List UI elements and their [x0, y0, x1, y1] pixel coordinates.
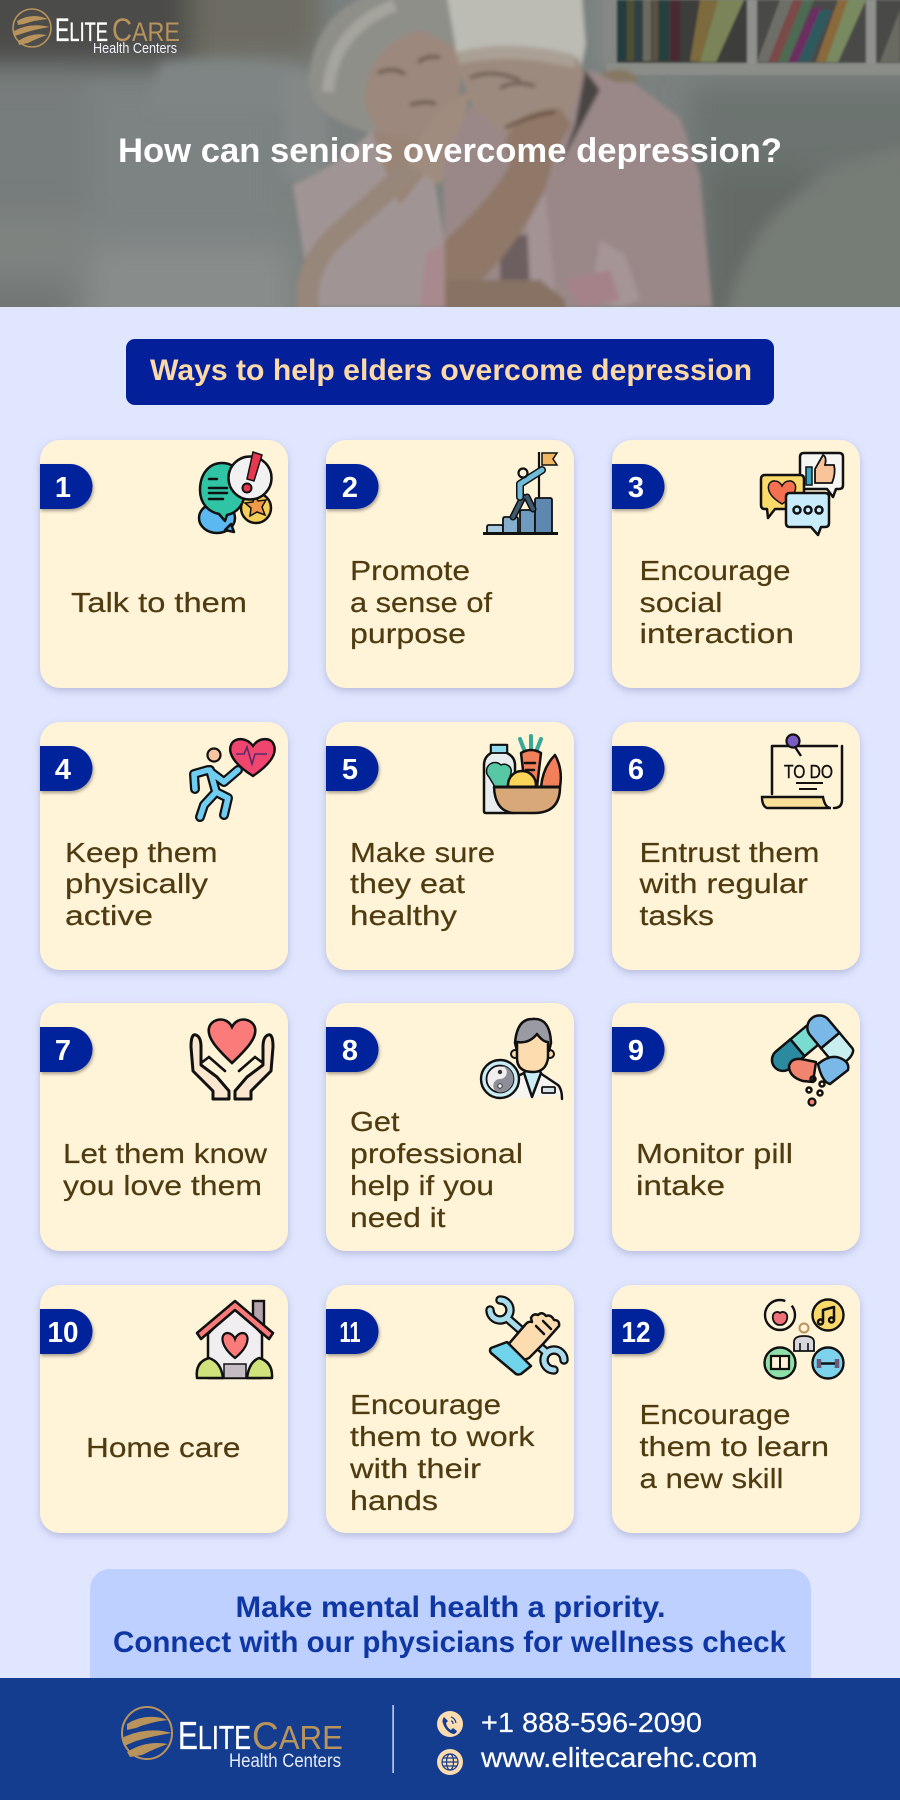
icon: home with heart	[197, 1301, 273, 1378]
badge 7	[40, 1027, 92, 1072]
label	[638, 837, 820, 931]
icon: globe	[437, 1749, 463, 1775]
label: physically	[65, 868, 208, 899]
man	[446, 0, 586, 72]
footer logo	[122, 1707, 343, 1772]
title: How can seniors overcome depression?	[118, 132, 782, 170]
label: with regular	[638, 868, 808, 899]
logo: Elite Care top: Health Centers	[93, 40, 177, 57]
icon: to-do note	[762, 734, 842, 808]
badge 10: 10	[48, 1317, 78, 1349]
icon: to-do note: TO DO	[784, 762, 833, 782]
label: healthy	[350, 900, 457, 931]
badge 4	[40, 746, 92, 791]
badge 1: 1	[55, 472, 71, 504]
label: professional	[350, 1138, 523, 1169]
card 7	[40, 1003, 288, 1251]
icon: healthy food bowl	[484, 736, 561, 813]
badge 5	[326, 746, 379, 791]
icon: hands holding heart	[191, 1020, 273, 1099]
card 8	[326, 1003, 574, 1251]
icon: phone	[437, 1711, 463, 1737]
label: Entrust them	[640, 837, 820, 868]
icon: doctor with yin-yang	[481, 1019, 562, 1099]
badge 2: 2	[342, 472, 358, 504]
label: you love them	[63, 1170, 262, 1201]
heading banner	[126, 339, 774, 405]
card 6	[612, 722, 860, 970]
label: them to work	[350, 1421, 536, 1452]
card 2	[326, 440, 574, 688]
label: hands	[350, 1485, 438, 1516]
label: a sense of	[350, 587, 492, 618]
label	[63, 1138, 268, 1201]
icon: social bubbles	[761, 453, 843, 535]
card 11	[326, 1285, 574, 1533]
logo: Elite Care top: CARE	[112, 12, 180, 48]
icon: hand with wrench	[490, 1300, 564, 1374]
label	[350, 555, 492, 649]
label: Encourage	[350, 1389, 501, 1420]
card 4	[40, 722, 288, 970]
label: Home care	[86, 1432, 240, 1463]
icon: skills circles	[764, 1300, 844, 1378]
badge 10	[40, 1309, 92, 1354]
label: Make sure	[350, 837, 495, 868]
footer logo: Health Centers	[229, 1751, 341, 1772]
heading banner: Ways to help elders overcome depression	[150, 354, 752, 387]
phone contact: +1 888-596-2090	[481, 1707, 702, 1738]
label: Talk to them	[71, 587, 247, 618]
badge 9: 9	[628, 1035, 644, 1067]
card 9	[612, 1003, 860, 1251]
woman	[309, 0, 458, 135]
label: Encourage	[640, 1399, 790, 1430]
footer bar	[0, 1678, 900, 1800]
badge 8	[326, 1027, 379, 1072]
label: social	[640, 587, 722, 618]
badge 7: 7	[55, 1035, 71, 1067]
label: need it	[350, 1202, 446, 1233]
label	[350, 837, 495, 931]
badge 11	[326, 1309, 379, 1354]
badge 3	[612, 464, 665, 509]
badge 1	[40, 464, 92, 509]
badge 5: 5	[342, 754, 358, 786]
label: intake	[636, 1170, 725, 1201]
logo: Elite Care top: ELITE	[55, 12, 108, 48]
label: tasks	[640, 900, 714, 931]
badge 3: 3	[628, 472, 644, 504]
label	[349, 1389, 536, 1516]
label: Let them know	[63, 1138, 268, 1169]
card 5	[326, 722, 574, 970]
label: Promote	[350, 555, 470, 586]
label: purpose	[350, 618, 466, 649]
badge 4: 4	[55, 754, 71, 786]
call to action: Make mental health a priority.	[236, 1591, 666, 1624]
label	[636, 1138, 793, 1201]
logo: Elite Care top	[13, 9, 180, 57]
badge 12	[612, 1309, 665, 1354]
footer logo: ELITE	[178, 1715, 251, 1758]
card 10	[40, 1285, 288, 1533]
badge 8: 8	[342, 1035, 358, 1067]
icon: runner with heart	[194, 739, 275, 817]
label: Get	[350, 1106, 400, 1137]
badge 6: 6	[628, 754, 644, 786]
label: they eat	[350, 868, 465, 899]
label	[65, 837, 218, 931]
badge 2	[326, 464, 379, 509]
call to action: Connect with our physicians for wellness check	[113, 1626, 786, 1659]
label: help if you	[350, 1170, 494, 1201]
bookshelf	[606, 0, 900, 75]
label	[640, 555, 794, 649]
divider	[392, 1705, 394, 1773]
website contact: www.elitecarehc.com	[480, 1742, 758, 1773]
badge 9	[612, 1027, 665, 1072]
label: interaction	[640, 618, 794, 649]
footer logo: CARE	[252, 1715, 343, 1758]
label: a new skill	[640, 1463, 784, 1494]
header photo: elderly couple on sofa	[0, 0, 900, 340]
icon: pill capsules	[767, 1011, 856, 1106]
label: Keep them	[65, 837, 218, 868]
call to action	[90, 1569, 811, 1678]
icon: climbing stairs with flag	[483, 452, 558, 534]
card 12	[612, 1285, 860, 1533]
label: Monitor pill	[636, 1138, 793, 1169]
card 3	[612, 440, 860, 688]
label: active	[65, 900, 153, 931]
card 1	[40, 440, 288, 688]
badge 12: 12	[622, 1317, 650, 1349]
label: Encourage	[640, 555, 790, 586]
badge 11: 11	[340, 1317, 360, 1349]
label	[350, 1106, 523, 1233]
label: them to learn	[640, 1431, 829, 1462]
icon: chat bubbles	[199, 452, 272, 533]
label	[640, 1399, 829, 1494]
badge 6	[612, 746, 665, 791]
label: with their	[349, 1453, 481, 1484]
